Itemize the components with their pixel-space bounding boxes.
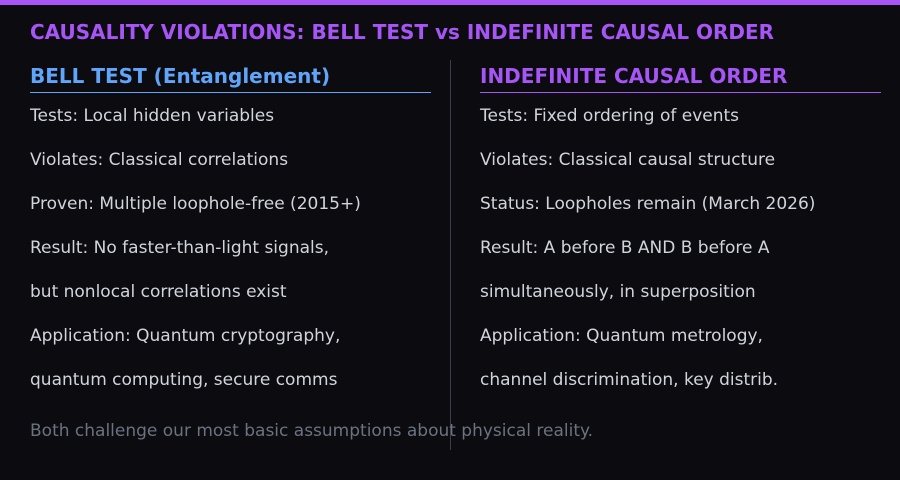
title: CAUSALITY VIOLATIONS: BELL TEST vs INDEFINITE CAUSAL ORDER: [30, 20, 774, 44]
text block: bell details: Tests: Local hidden variables: [29, 106, 274, 126]
footer note: Both challenge our most basic assumptions about physical reality.: [30, 421, 593, 441]
text block: bell details: [29, 106, 361, 390]
panel: indefinite causal order: [479, 64, 881, 390]
text block: bell details: Violates: Classical correlations: [30, 150, 288, 170]
text block: bell details: Application: Quantum cryptography,: [30, 326, 340, 346]
text block: ICO details: simultaneously, in superposition: [480, 282, 756, 302]
text block: bell details: Result: No faster-than-light signals,: [30, 238, 329, 258]
text block: ICO details: channel discrimination, key distrib.: [480, 370, 778, 390]
text block: ICO details: Tests: Fixed ordering of events: [479, 106, 739, 126]
text block: ICO details: Violates: Classical causal structure: [480, 150, 775, 170]
text block: bell details: but nonlocal correlations exist: [30, 282, 287, 302]
text block: ICO details: Status: Loopholes remain (March 2026): [480, 194, 815, 214]
text block: ICO details: [479, 106, 815, 390]
text block: ICO details: Application: Quantum metrology,: [480, 326, 763, 346]
text block: bell details: quantum computing, secure comms: [30, 370, 338, 390]
text block: ICO details: Result: A before B AND B before A: [480, 238, 770, 258]
panel: bell test: [29, 64, 431, 390]
heading: ICO: INDEFINITE CAUSAL ORDER: [480, 64, 787, 88]
heading: bell test: BELL TEST (Entanglement): [30, 64, 330, 88]
text block: bell details: Proven: Multiple loophole-free (2015+): [30, 194, 361, 214]
